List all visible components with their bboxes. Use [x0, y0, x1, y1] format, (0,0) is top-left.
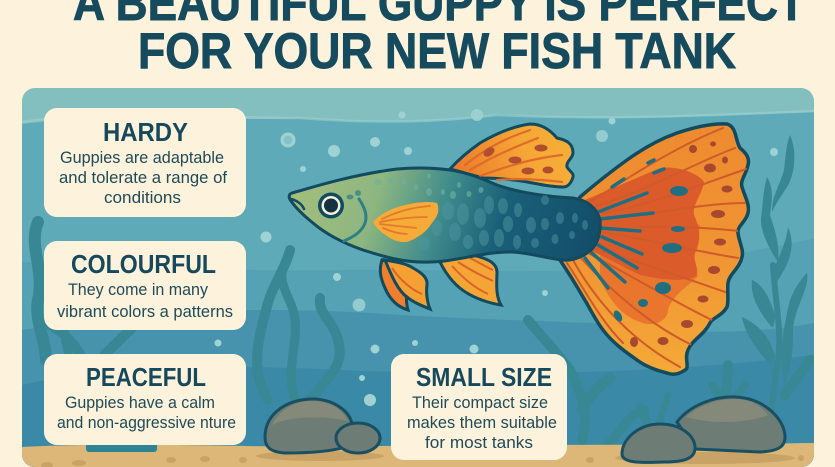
body	[289, 168, 600, 262]
panel: colourful card: They come in many	[68, 281, 209, 299]
guppy fish	[289, 124, 749, 374]
panel: small size card: for most tanks	[425, 434, 533, 452]
plants: background seaweed	[35, 222, 810, 450]
panel: hardy card	[44, 108, 246, 217]
title: FOR YOUR NEW FISH TANK	[138, 23, 736, 79]
panel: small size card: makes them suitable	[407, 414, 557, 432]
panel: small size card	[391, 354, 567, 460]
panel: peaceful card: PEACEFUL	[86, 364, 206, 392]
panel: colourful card: vibrant colors a patterns	[57, 303, 233, 321]
plant: right seaweed leaves	[742, 135, 807, 385]
panel: hardy card: and tolerate a range of	[59, 169, 227, 187]
panel: small size card: Their compact size	[412, 394, 548, 412]
panel: colourful card: COLOURFUL	[71, 251, 216, 279]
title	[73, 0, 805, 79]
sand	[22, 443, 814, 467]
panel: underwater scene	[22, 88, 814, 467]
panel: hardy card: Guppies are adaptable	[60, 149, 224, 167]
pectoral fin	[373, 202, 438, 242]
panel: small size card: SMALL SIZE	[416, 364, 552, 392]
rocks: left	[265, 399, 380, 453]
rocks: right	[622, 397, 785, 462]
panel: hardy card: conditions	[104, 189, 181, 207]
panel: peaceful card: Guppies have a calm	[65, 394, 215, 412]
bubbles	[214, 109, 778, 406]
panel: peaceful card: and non-aggressive nture	[57, 414, 236, 432]
pelvic fins	[380, 260, 430, 310]
dorsal fin	[450, 124, 573, 187]
eye	[318, 192, 344, 218]
panel: colourful card	[44, 241, 246, 330]
panel: hardy card: HARDY	[103, 119, 188, 147]
anal fin	[440, 255, 501, 305]
tail fin	[560, 124, 749, 374]
panel: peaceful card	[44, 354, 246, 445]
